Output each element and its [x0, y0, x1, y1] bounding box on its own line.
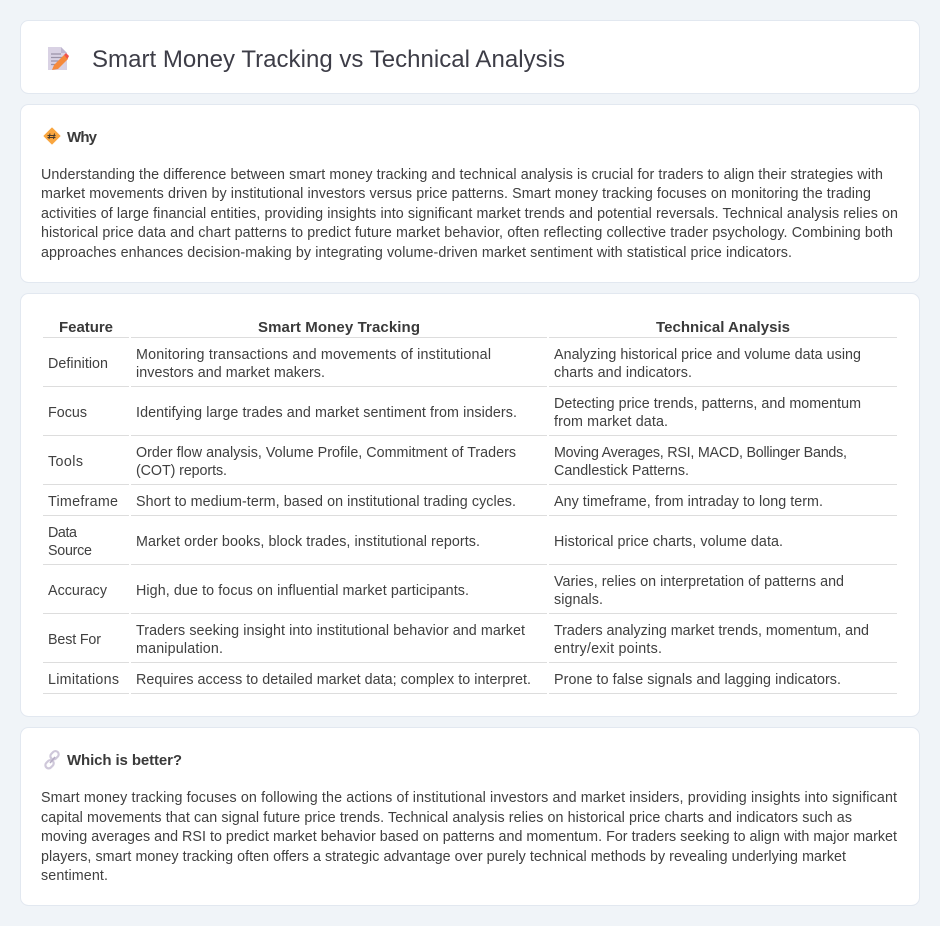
row: accuracy: Varies, relies on interpretation of patterns and [554, 574, 844, 590]
row: timeframe: Any timeframe, from intraday to long term. [554, 494, 823, 510]
row: accuracy [48, 574, 844, 608]
row: accuracy: Accuracy [48, 583, 108, 599]
heading: why: Why [67, 129, 98, 146]
panel: header [20, 20, 920, 94]
title: Smart Money Tracking vs Technical Analysis [92, 46, 565, 73]
text block: which is better paragraph: moving averages and RSI to predict market behavior based on patterns and momentum. For traders seeking to align with major market [41, 829, 897, 845]
row: definition [48, 347, 861, 381]
table header: Feature [59, 319, 113, 336]
panel: which is better [20, 728, 920, 906]
row: focus: Identifying large trades and market sentiment from insiders. [136, 405, 517, 421]
panel: comparison table [20, 294, 920, 716]
row: timeframe: Short to medium-term, based on institutional trading cycles. [136, 494, 516, 510]
text block: why paragraph: approaches enhances decision-making by integrating volume-driven market sentiment with statistical price indicators. [41, 245, 792, 261]
row: limitations: Prone to false signals and lagging indicators. [554, 672, 841, 688]
row: limitations: Requires access to detailed market data; complex to interpret. [136, 672, 531, 688]
row: definition: Analyzing historical price and volume data using [554, 347, 861, 363]
row: timeframe: Timeframe [48, 494, 118, 510]
row: best for: Traders analyzing market trends, momentum, and [554, 623, 869, 639]
row: tools: Order flow analysis, Volume Profile, Commitment of Traders [136, 445, 516, 461]
row: data source: Source [48, 543, 92, 559]
table header [59, 319, 790, 336]
row: limitations [48, 672, 841, 688]
row: data source: Data [48, 525, 77, 541]
row: limitations: Limitations [48, 672, 119, 688]
row: accuracy: High, due to focus on influential market participants. [136, 583, 469, 599]
row: definition: Definition [48, 356, 108, 372]
row: best for: entry/exit points. [554, 641, 662, 657]
text block: which is better paragraph: Smart money tracking focuses on following the actions of institutional investors and market insiders, providing insights into significant [41, 790, 897, 806]
row: timeframe [48, 494, 823, 510]
icon: diamond sign [44, 128, 60, 144]
text block: why paragraph: activities of large financial entities, providing insights into significant market trends and potential reversals. Technical analysis relies on [41, 206, 898, 222]
text block: why paragraph: historical price data and chart patterns to predict future market behavior, often reflecting collective trader psychology. Combining both [41, 225, 893, 241]
text block: why paragraph: Understanding the difference between smart money tracking and technical analysis is crucial for traders to align their strategies with [41, 167, 883, 183]
icon: link [44, 750, 60, 770]
row: best for: Best For [48, 632, 101, 648]
row: tools: (COT) reports. [136, 463, 227, 479]
row: focus [48, 396, 861, 430]
row: best for: Traders seeking insight into institutional behavior and market [136, 623, 525, 639]
table header: Smart Money Tracking [258, 319, 420, 336]
row: tools: Candlestick Patterns. [554, 463, 689, 479]
row: focus: Focus [48, 405, 87, 421]
table header: Technical Analysis [656, 319, 790, 336]
text block: which is better paragraph [41, 790, 897, 884]
row: definition: charts and indicators. [554, 365, 692, 381]
row: definition: investors and market makers. [136, 365, 325, 381]
row: tools: Tools [48, 454, 83, 470]
panel: why [20, 104, 920, 282]
row: data source: Market order books, block trades, institutional reports. [136, 534, 480, 550]
row: tools: Moving Averages, RSI, MACD, Bollinger Bands, [554, 445, 847, 461]
text block: why paragraph: market movements driven by institutional investors versus price patterns. Smart money tracking focuses on monitoring the trading [41, 186, 871, 202]
row: accuracy: signals. [554, 592, 603, 608]
icon: memo [48, 47, 69, 70]
row: data source: Historical price charts, volume data. [554, 534, 783, 550]
row: best for: manipulation. [136, 641, 223, 657]
row: tools [48, 445, 847, 479]
text block: which is better paragraph: sentiment. [41, 868, 108, 884]
heading: which is better: Which is better? [67, 752, 182, 769]
row: focus: from market data. [554, 414, 668, 430]
row: data source [48, 525, 783, 559]
row: focus: Detecting price trends, patterns, and momentum [554, 396, 861, 412]
text block: which is better paragraph: players, smart money tracking often offers a strategic advantage over purely technical methods by revealing underlying market [41, 849, 846, 865]
text block: why paragraph [41, 167, 898, 261]
text block: which is better paragraph: capital movements that can signal future price trends. Technical analysis relies on historical price charts and indicators such as [41, 810, 852, 826]
row: definition: Monitoring transactions and movements of institutional [136, 347, 491, 363]
row: best for [48, 623, 869, 657]
